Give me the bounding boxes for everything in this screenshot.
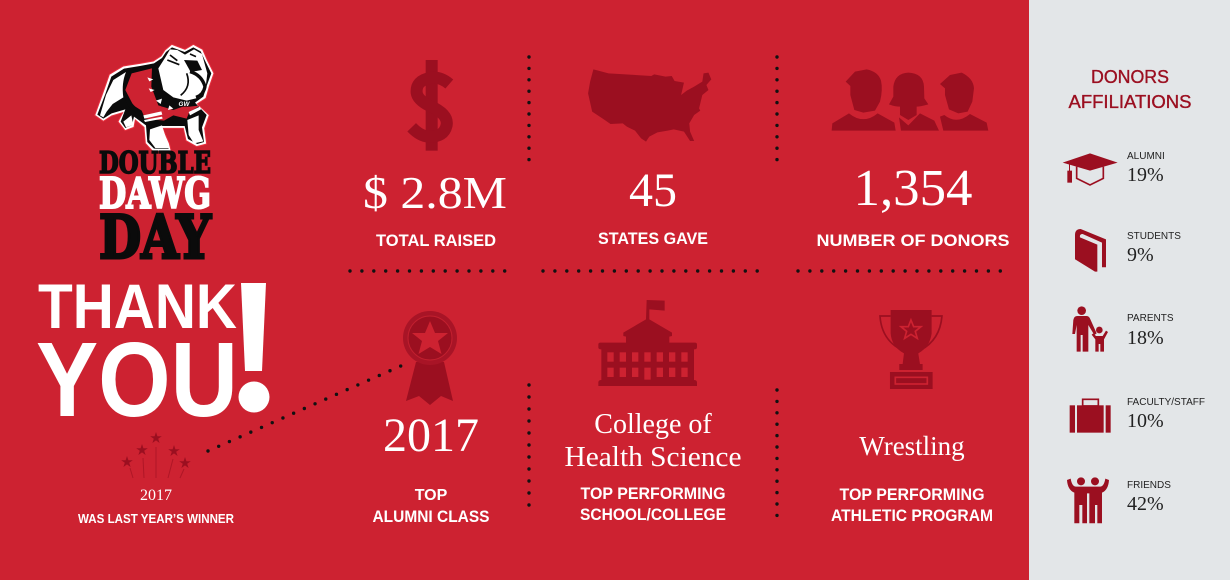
stat: number of donors: 1,354 [854, 160, 972, 217]
row: friends [1067, 477, 1171, 523]
icon: three people [832, 69, 988, 131]
icon: award ribbon [403, 311, 457, 405]
wordmark: DOUBLE: DOUBLE [99, 146, 211, 181]
heading: Thank You!: YOU [36, 321, 238, 439]
stat: number of donors: NUMBER OF DONORS [816, 231, 1010, 250]
stat: top alumni class: 2017 [383, 409, 479, 462]
row: friends: 42% [1127, 493, 1164, 515]
stat: total raised: TOTAL RAISED [376, 231, 496, 250]
icon: fireworks stars [121, 432, 191, 478]
stat: total raised: $ 2.8M [363, 167, 507, 218]
icon: United States map [588, 69, 711, 142]
icon: bulldog mascot: GW [179, 101, 190, 108]
stat: total raised [363, 60, 507, 250]
wordmark: DAY: DAY [99, 203, 212, 273]
row: alumni [1063, 151, 1165, 186]
text: 2017 was last year's winner: WAS LAST YEAR’S WINNER [78, 512, 234, 526]
stat: top athletic program [831, 310, 993, 525]
heading: donors affiliations: DONORS [1091, 67, 1169, 87]
stat: top alumni class: ALUMNI CLASS [372, 508, 490, 526]
row: parents: PARENTS [1127, 313, 1174, 324]
icon: trophy [880, 310, 942, 389]
heading: donors affiliations [1068, 67, 1192, 112]
row: students [1075, 229, 1181, 272]
stat: top athletic program: TOP PERFORMING [840, 486, 984, 504]
stat: number of donors [816, 69, 1010, 250]
stat: top alumni class [372, 311, 490, 526]
row: parents [1072, 306, 1174, 352]
stat: top athletic program: Wrestling [859, 431, 965, 461]
logo: Double Dawg Day bulldog [95, 44, 214, 273]
heading: donors affiliations: AFFILIATIONS [1068, 92, 1192, 112]
text: 2017 was last year's winner: 2017 [140, 487, 172, 504]
row: students: 9% [1127, 244, 1154, 266]
text: 2017 was last year's winner [78, 487, 234, 526]
panel: donors affiliations [1063, 67, 1205, 523]
row: students: STUDENTS [1127, 231, 1181, 242]
stat: states gave: STATES GAVE [598, 229, 708, 248]
stat: top performing school: College of [594, 409, 712, 440]
row: alumni: 19% [1127, 164, 1164, 186]
heading: Thank You!: THANK [38, 272, 237, 342]
icon: bulldog mascot [95, 44, 214, 151]
stat: states gave: 45 [629, 164, 677, 217]
stat: top performing school: TOP PERFORMING [580, 485, 726, 503]
stat: top performing school [564, 300, 742, 524]
row: friends: FRIENDS [1127, 480, 1171, 491]
wordmark: DAWG: DAWG [99, 169, 211, 218]
row: faculty and staff: 10% [1127, 410, 1164, 432]
row: alumni: ALUMNI [1127, 151, 1165, 162]
heading: Thank You! [36, 272, 270, 439]
stat: top performing school: SCHOOL/COLLEGE [580, 506, 726, 524]
icon: college building [598, 300, 697, 386]
row: faculty and staff: FACULTY/STAFF [1127, 397, 1205, 408]
row: parents: 18% [1127, 327, 1164, 349]
stat: top athletic program: ATHLETIC PROGRAM [831, 507, 993, 525]
stat: top performing school: Health Science [564, 442, 742, 473]
row: faculty and staff [1070, 397, 1205, 433]
stat: states gave [588, 69, 711, 248]
stat: top alumni class: TOP [415, 487, 448, 504]
icon: dollar sign [412, 60, 449, 151]
